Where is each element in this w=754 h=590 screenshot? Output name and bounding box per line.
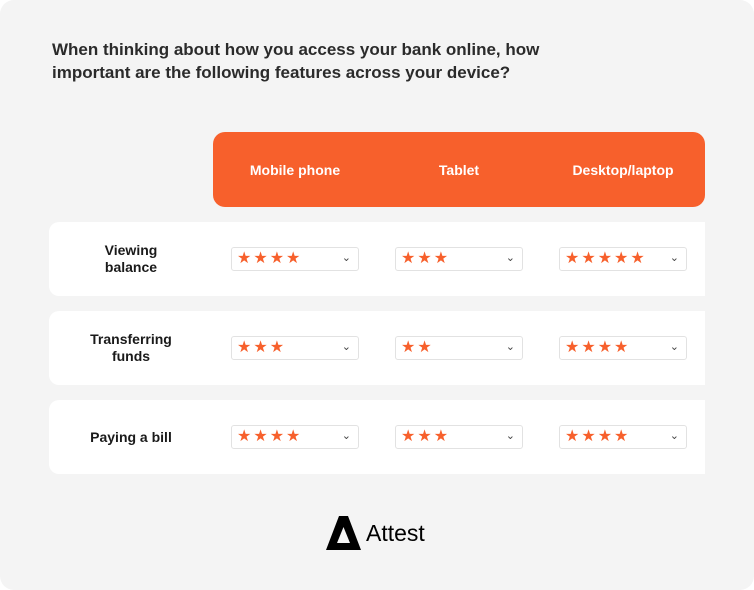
- row: transferring funds: ★★★: [237, 339, 286, 356]
- row: viewing balance: [49, 222, 705, 296]
- row: paying a bill: Paying a bill: [90, 428, 172, 444]
- logo: Attest: Attest: [366, 520, 425, 546]
- row: transferring funds: ★★: [401, 339, 434, 356]
- logo: Attest: [326, 516, 425, 550]
- row: viewing balance: ★★★★★: [565, 250, 647, 267]
- row: viewing balance: Viewing: [105, 242, 157, 258]
- row: paying a bill: ★★★: [401, 428, 450, 445]
- row: paying a bill: ★★★★: [565, 428, 630, 445]
- header: device columns: Tablet: [439, 162, 479, 178]
- row: transferring funds: ⌄: [342, 341, 351, 353]
- row: transferring funds: ★★★★: [565, 339, 630, 356]
- row: paying a bill: ⌄: [342, 430, 351, 442]
- row: transferring funds: Transferring: [90, 331, 172, 347]
- row: paying a bill: ★★★★: [237, 428, 302, 445]
- row: viewing balance: ⌄: [506, 252, 515, 264]
- row: viewing balance: ★★★★: [237, 250, 302, 267]
- row: transferring funds: ⌄: [506, 341, 515, 353]
- row: paying a bill: ⌄: [506, 430, 515, 442]
- row: paying a bill: [49, 400, 705, 474]
- row: viewing balance: ⌄: [670, 252, 679, 264]
- header: device columns: Desktop/laptop: [572, 162, 674, 178]
- header: device columns: [213, 132, 705, 207]
- row: viewing balance: ★★★: [401, 250, 450, 267]
- row: viewing balance: balance: [105, 259, 157, 275]
- row: transferring funds: ⌄: [670, 341, 679, 353]
- title: When thinking about how you access your bank online, how important are the following features across your device?: [52, 40, 539, 82]
- row: transferring funds: funds: [112, 348, 150, 364]
- row: viewing balance: ⌄: [342, 252, 351, 264]
- row: transferring funds: [49, 311, 705, 385]
- header: device columns: Mobile phone: [250, 162, 340, 178]
- row: paying a bill: ⌄: [670, 430, 679, 442]
